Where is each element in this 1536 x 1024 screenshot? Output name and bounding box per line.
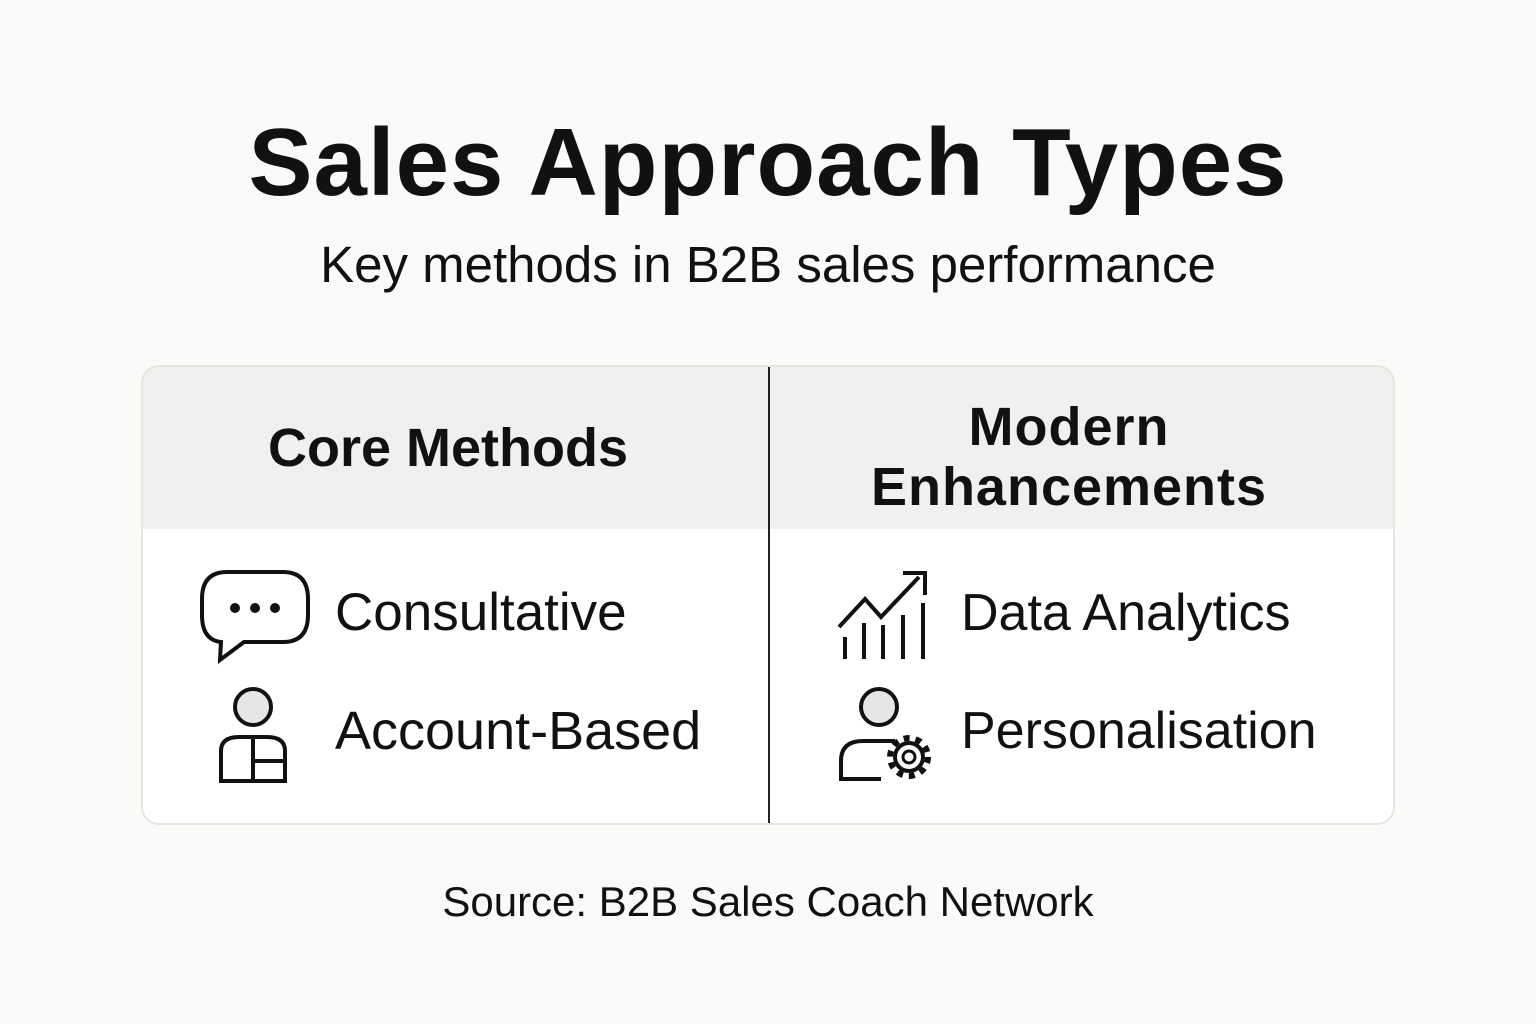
icon: person — [219, 687, 287, 783]
label: Data Analytics — [961, 584, 1290, 642]
heading: modern enhancements — [871, 397, 1267, 517]
divider — [768, 367, 770, 823]
heading: core methods: Core Methods — [268, 418, 628, 478]
label: Personalisation — [961, 702, 1317, 760]
item: consultative — [200, 570, 627, 664]
icon: chart — [838, 571, 927, 659]
title: Sales Approach Types — [248, 109, 1288, 216]
item: data analytics — [838, 571, 1290, 659]
icon: speech bubble — [200, 570, 310, 664]
panel: table card — [141, 365, 1395, 825]
item: account-based — [219, 687, 701, 783]
label: Account-Based — [335, 701, 701, 761]
subtitle: Key methods in B2B sales performance — [320, 236, 1216, 293]
label: Consultative — [335, 583, 627, 642]
source: Source: B2B Sales Coach Network — [442, 878, 1094, 925]
icon: person with gear — [839, 687, 931, 781]
heading: modern enhancements: Enhancements — [871, 457, 1267, 517]
item: personalisation — [839, 687, 1317, 781]
header band — [143, 367, 1393, 529]
heading: modern enhancements: Modern — [968, 397, 1170, 457]
